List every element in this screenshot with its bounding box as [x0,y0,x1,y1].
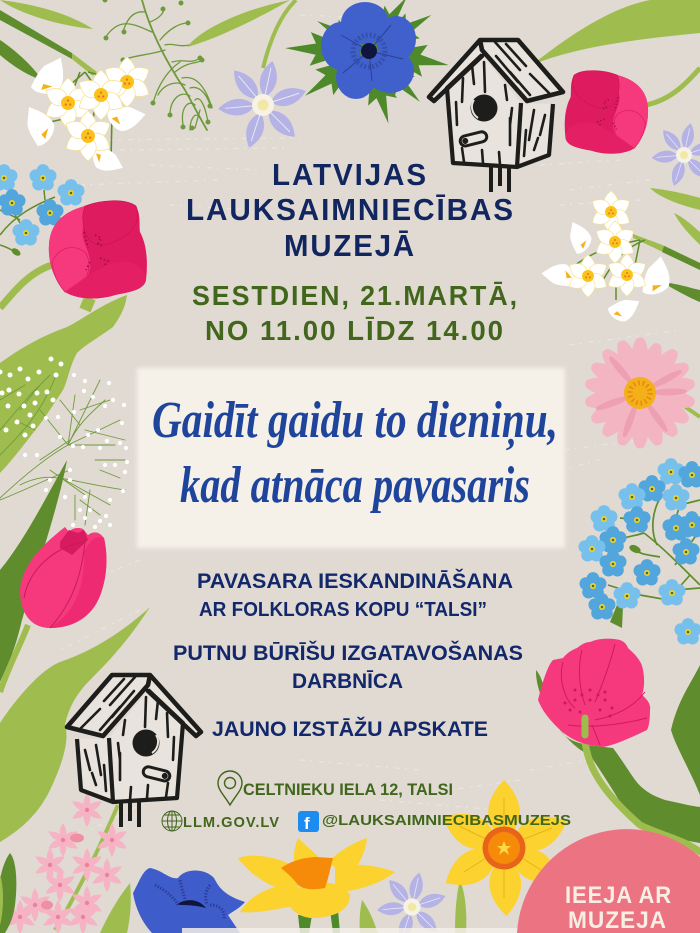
bottom edge smear [182,928,522,933]
flowers: baby's breath [0,359,127,527]
flowers: white narcissus top left [18,52,153,178]
programme list: PAVASARA IESKANDINĀŠANA [197,569,513,593]
panel: slogan background [137,368,565,548]
fine plant: top [105,0,212,130]
flower: anemone bottom [133,868,245,933]
icon: facebook [298,811,319,833]
programme list [173,569,523,741]
bird house: bottom [67,675,201,827]
leaves: bottom left [0,853,466,933]
stem: left tulip [0,265,90,310]
leaf and stem: top right [532,0,700,302]
slogan: kad atnāca pavasaris [180,457,530,514]
flowers: forget-me-nots right [578,458,700,644]
flower: gerbera [584,338,700,448]
leaf: big light green bottom left [0,607,150,842]
flower: red tulip left [49,201,147,298]
stem: bottom right tulip [584,718,700,852]
background texture [40,15,680,830]
title: MUZEJĀ [284,228,416,263]
programme list: PUTNU BŪRĪŠU IZGATAVOŠANAS [173,641,523,665]
flower: yellow daffodil side [238,838,395,918]
icon: facebook: f [304,814,310,833]
flower: yellow daffodil right [436,780,573,917]
address: CELTNIEKU IELA 12, TALSI [243,781,453,799]
title: LAUKSAIMNIECĪBAS [186,192,515,227]
slogan: Gaidīt gaidu to dieniņu, [152,392,558,451]
flower: lavender scilla top [217,59,308,150]
leaf: dark blade left [0,460,67,682]
slogan [152,392,558,514]
flower: pink tulip left [0,527,106,692]
title: LATVIJAS [272,157,428,192]
icon: location pin [218,771,242,805]
badge: free entry [517,829,700,933]
leaves: top left [0,0,97,80]
flower: red tulip top right [565,71,648,154]
flower: scilla bottom [376,871,447,933]
date and time: SESTDIEN, 21.MARTĀ, [192,280,519,311]
programme list: JAUNO IZSTĀŽU APSKATE [212,717,488,741]
leaf: left wavy [0,295,127,473]
website: LLM.GOV.LV [183,814,280,831]
badge: free entry: IEEJA AR [565,882,672,909]
bird house: top [429,40,563,192]
flower: blue anemone top [284,0,452,128]
icon: globe [162,811,182,831]
flower: scilla right [651,122,700,188]
flowers: white narcissus right [540,191,674,326]
flowers: pink hyacinth [4,793,128,933]
date and time [192,280,519,346]
title [186,157,515,263]
flowers: forget-me-nots left [0,164,84,257]
programme list: DARBNĪCA [292,670,403,693]
leaves: bottom right [536,665,700,843]
programme list: AR FOLKLORAS KOPU “TALSI” [199,599,487,621]
facebook handle: @LAUKSAIMNIECIBASMUZEJS [322,812,571,829]
leaf: top centre [187,0,296,68]
flower: pink tulip bottom right [538,639,650,747]
date and time: NO 11.00 LĪDZ 14.00 [205,315,505,346]
